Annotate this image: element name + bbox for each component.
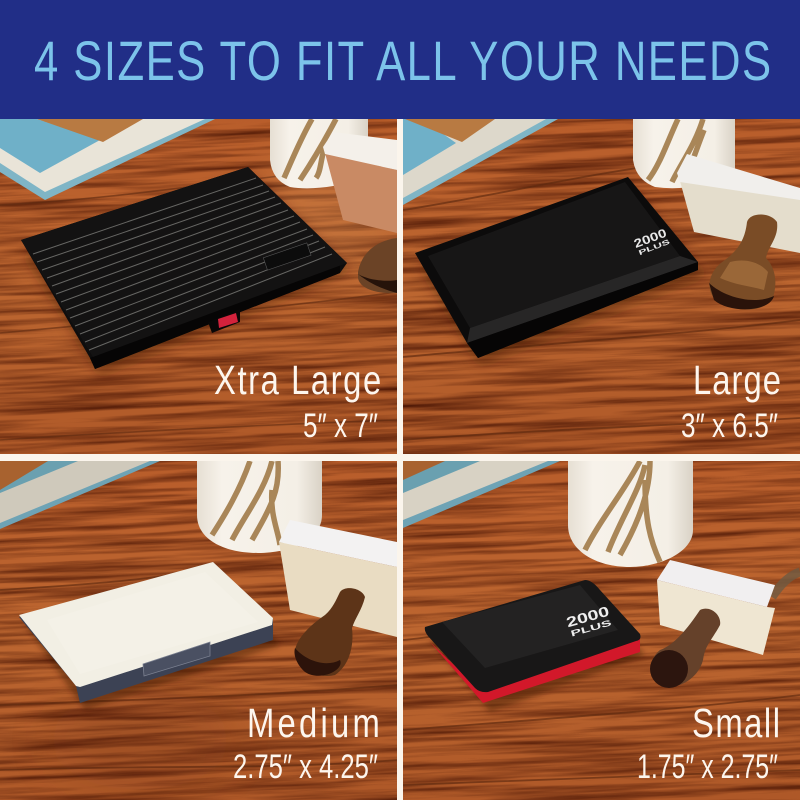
shadow	[25, 625, 280, 710]
wooden handle	[709, 214, 777, 310]
jar with twine	[270, 119, 368, 188]
wooden handle	[294, 588, 365, 676]
jar with twine	[197, 461, 322, 553]
wood block stamp	[323, 132, 397, 293]
shadow	[420, 185, 705, 365]
black bevelled pad	[415, 177, 698, 358]
black and red pad	[425, 580, 640, 703]
red tab	[218, 313, 238, 328]
wood block stamp	[677, 154, 800, 253]
wooden handle	[650, 609, 720, 688]
logo	[634, 229, 670, 255]
label: xtra large	[214, 366, 380, 438]
twig accent	[772, 572, 800, 597]
size: 2.75 x 4.25: 2.75″ x 4.25″	[233, 748, 378, 786]
logo: 2000	[632, 226, 669, 251]
label: medium: Medium	[247, 699, 380, 746]
jar with twine	[568, 461, 693, 567]
wood block stamp	[279, 520, 397, 637]
size: 5 x 7: 5″ x 7″	[303, 407, 378, 445]
book	[403, 461, 560, 528]
shadow	[25, 175, 350, 375]
title: 4 SIZES TO FIT ALL YOUR NEEDS	[34, 30, 771, 92]
panel: small ink pad	[403, 461, 800, 800]
black ribbed pad	[21, 167, 347, 369]
label: large	[682, 366, 780, 438]
logo: PLUS	[569, 617, 613, 639]
label: small: Small	[692, 699, 780, 746]
label: small	[638, 708, 778, 778]
panel: extra large ink pad	[0, 119, 397, 454]
book	[0, 461, 160, 529]
panel: medium ink pad	[0, 461, 397, 800]
logo: 2000	[564, 603, 611, 630]
jar with twine	[633, 119, 735, 188]
white pad with navy base	[19, 562, 273, 703]
panel: large ink pad	[403, 119, 800, 454]
shadow	[429, 639, 646, 714]
logo	[566, 607, 611, 636]
book	[0, 119, 215, 200]
title banner	[0, 0, 800, 119]
logo: PLUS	[638, 239, 672, 257]
label: large: Large	[693, 356, 781, 403]
wood block stamp	[657, 560, 775, 655]
label: medium	[234, 708, 378, 778]
book	[403, 119, 558, 205]
label: xtra large: Xtra Large	[214, 356, 381, 403]
